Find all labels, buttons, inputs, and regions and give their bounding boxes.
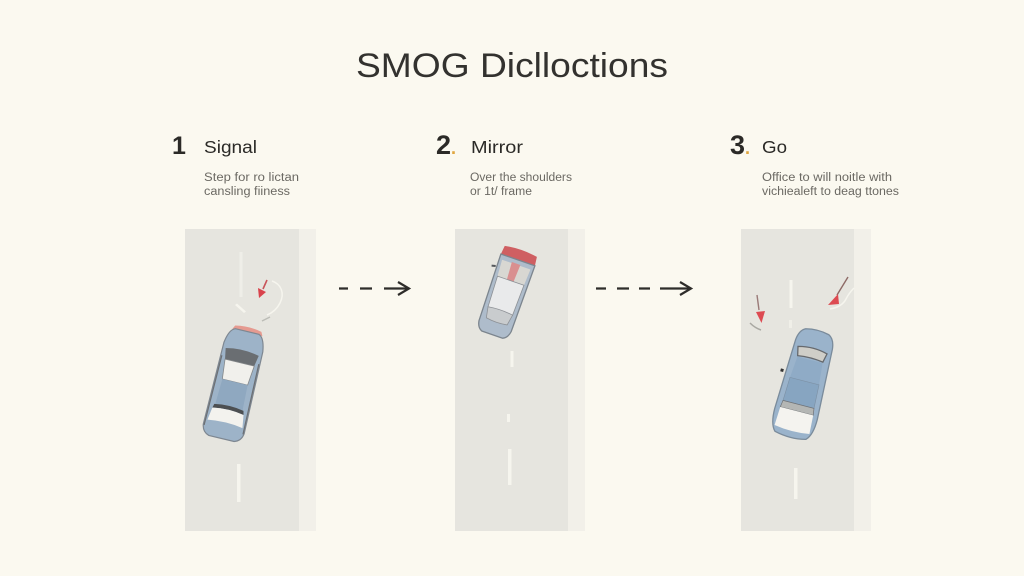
step 3 number: 3. — [730, 130, 750, 160]
step 1 title: Signal — [204, 137, 257, 157]
step 1 number: 1 — [172, 132, 186, 160]
lane markings — [789, 280, 798, 499]
arrow: step 1 to 2 — [339, 282, 409, 295]
lane markings — [235, 252, 246, 502]
panel: step 1 heading — [172, 132, 299, 198]
step 2 description: Over the shoulders — [470, 172, 572, 184]
step 1 description: Step for ro lictan — [204, 172, 299, 184]
step 3 description: Office to will noitle with — [762, 172, 892, 184]
step 2 title: Mirror — [471, 137, 523, 157]
panel: step 3 heading — [730, 130, 899, 198]
signal arrow — [258, 280, 282, 321]
arrow: step 2 to 3 — [596, 282, 691, 295]
warning arrow right — [828, 277, 854, 309]
step 2 description: or 1t/ frame — [470, 186, 532, 198]
step 2 number: 2. — [436, 130, 456, 160]
car 3 — [765, 324, 839, 443]
step 3 description: vichiealeft to deag ttones — [762, 186, 899, 198]
lane markings — [507, 351, 514, 485]
panel: road 1 — [185, 229, 316, 531]
panel: step 2 heading — [436, 130, 572, 198]
step 3 title: Go — [762, 137, 787, 157]
car 1 — [201, 322, 269, 443]
warning arrow left — [750, 295, 765, 330]
panel: road 2 — [455, 229, 585, 531]
step 1 description: cansling fiiness — [204, 186, 290, 198]
panel: road 3 — [741, 229, 871, 531]
car 2 — [470, 242, 538, 340]
title: SMOG Diclloctions — [356, 47, 668, 85]
